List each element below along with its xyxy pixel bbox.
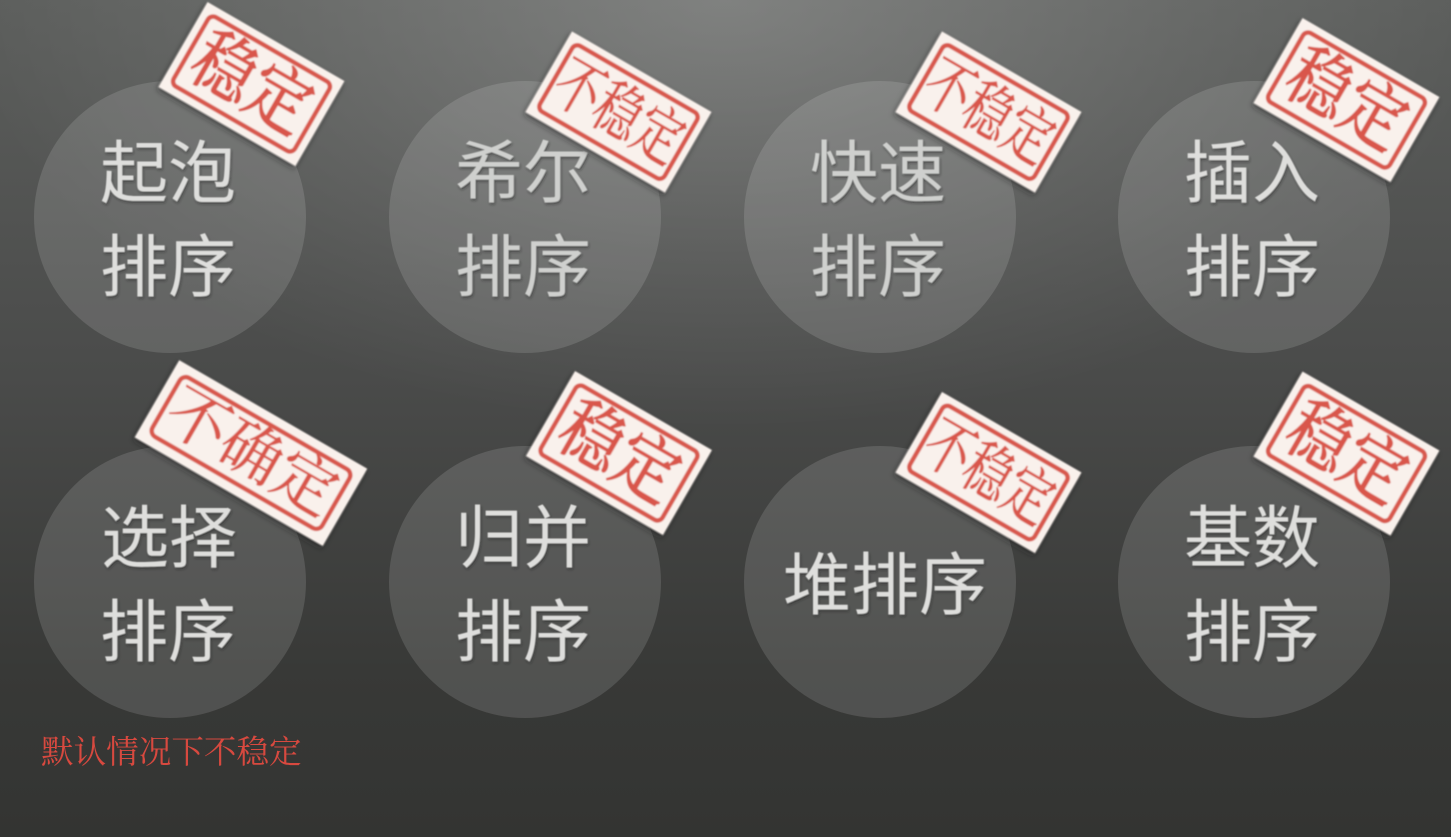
label: bubble sort: 排序 [100, 230, 236, 306]
circle: quick sort [744, 81, 1016, 353]
stamp: stable: 稳定 [1273, 35, 1420, 165]
stamp: unstable [526, 31, 711, 193]
circle: heap sort [744, 446, 1016, 718]
stamp: unstable: 不稳定 [541, 47, 696, 177]
stamp: unstable [896, 392, 1081, 553]
circle: insertion sort [1118, 81, 1390, 353]
panel: quick sort [744, 31, 1081, 353]
stamp: uncertain [135, 360, 367, 546]
panel: merge sort [389, 371, 712, 718]
panel: radix sort [1118, 372, 1439, 718]
stamp: unstable: 不稳定 [911, 408, 1066, 537]
label: bubble sort: 起泡 [100, 136, 236, 212]
stamp: stable [526, 371, 712, 535]
label: merge sort: 排序 [455, 595, 591, 671]
circle: merge sort [389, 446, 661, 718]
label: insertion sort: 插入 [1184, 136, 1320, 212]
label: radix sort: 基数 [1184, 501, 1320, 577]
circle: bubble sort [34, 81, 306, 353]
circle: shell sort [389, 81, 661, 353]
footnote: unstable by default: 默认情况下不稳定 [41, 734, 302, 771]
stamp: stable: 稳定 [178, 19, 325, 149]
label: heap sort: 堆排序 [783, 548, 987, 624]
label: quick sort: 快速 [810, 136, 946, 212]
panel: bubble sort [34, 2, 344, 353]
panel: selection sort [34, 360, 367, 718]
panel: heap sort [744, 392, 1081, 718]
stamp: stable: 稳定 [1273, 388, 1420, 519]
stamp: stable [159, 2, 344, 166]
circle: selection sort [34, 446, 306, 718]
stamp: stable [1254, 372, 1439, 535]
label: shell sort: 希尔 [455, 136, 591, 212]
stamp: unstable [896, 31, 1081, 193]
stamp: uncertain: 不确定 [153, 377, 349, 529]
label: radix sort: 排序 [1184, 595, 1320, 671]
stamp: unstable: 不稳定 [911, 47, 1066, 177]
label: selection sort: 排序 [100, 595, 236, 671]
stamp: stable [1254, 18, 1439, 182]
label: selection sort: 选择 [101, 501, 237, 577]
label: merge sort: 归并 [455, 501, 591, 577]
panel: shell sort [389, 31, 711, 353]
label: shell sort: 排序 [455, 230, 591, 306]
stamp: stable: 稳定 [546, 388, 692, 518]
circle: radix sort [1118, 446, 1390, 718]
label: insertion sort: 排序 [1184, 230, 1320, 306]
label: quick sort: 排序 [810, 230, 946, 306]
panel: insertion sort [1118, 18, 1439, 353]
